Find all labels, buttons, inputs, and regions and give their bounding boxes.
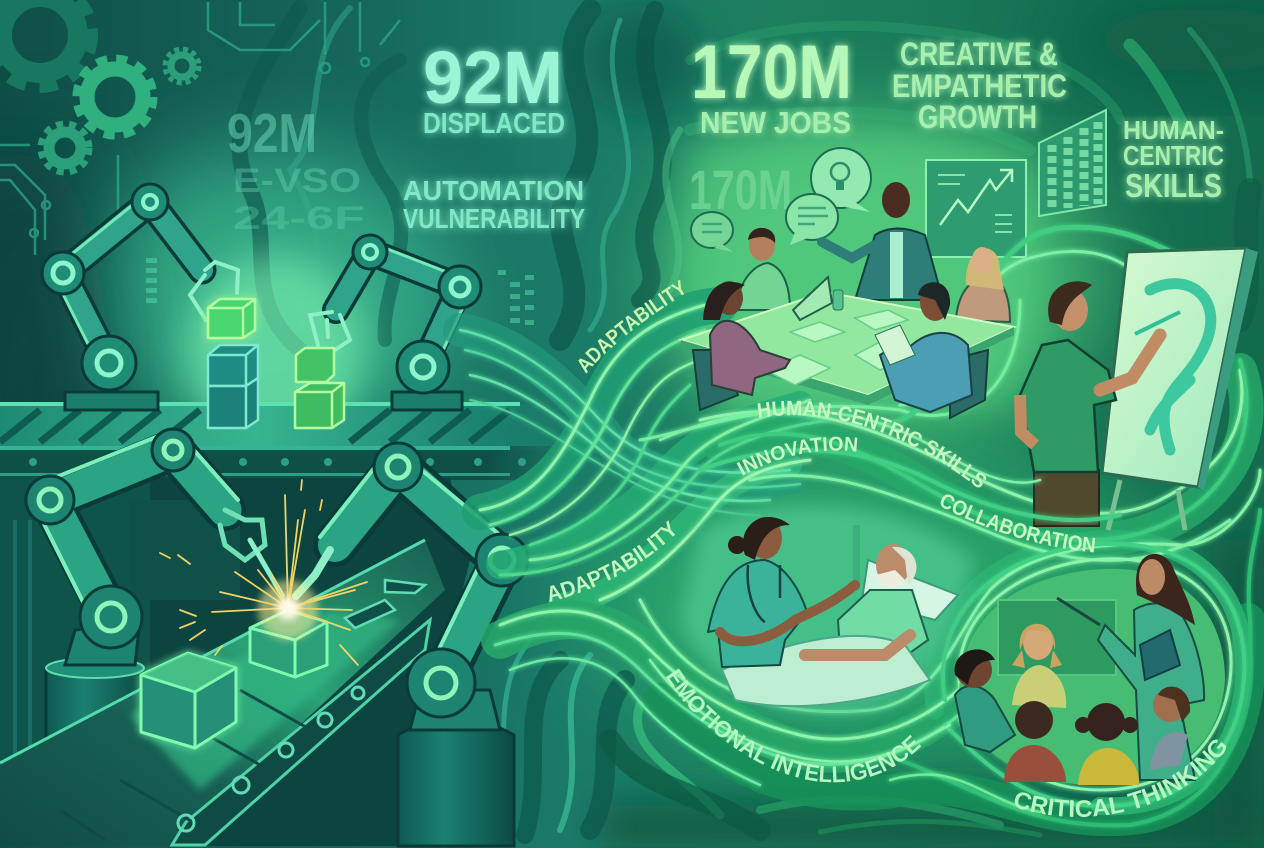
easel and canvas [1102, 248, 1258, 530]
robot base: lower left [46, 658, 144, 768]
pillow [862, 560, 958, 620]
data columns [146, 258, 534, 325]
robot arm: lower left [26, 429, 282, 665]
chart board [926, 160, 1026, 257]
ribbon label: adaptability upper: ADAPTABILITY [578, 280, 684, 374]
heading: automation vulnerability: VULNERABILITY [403, 203, 585, 234]
faded stat: 92M with garbled data [227, 102, 365, 236]
heading: 170M new jobs [691, 30, 852, 140]
person: seated child [1004, 701, 1066, 782]
person: patient [838, 544, 928, 660]
faded stat: 170M: 170M [689, 158, 792, 221]
lower conveyor belt [0, 540, 445, 846]
bed blanket [722, 636, 930, 706]
ribbon label: human-centric skills: HUMAN-CENTRIC SKILLS [758, 400, 986, 488]
robot arm: lower right [296, 443, 528, 846]
faded stat: 92M with garbled data: E-VSO [233, 162, 361, 200]
ribbon label: adaptability lower: ADAPTABILITY [549, 520, 676, 602]
heading: 170M new jobs: NEW JOBS [700, 105, 851, 140]
scene glow: meeting room [680, 131, 1030, 420]
person: girl [1012, 624, 1066, 708]
person: woman left [693, 281, 790, 410]
heading: automation vulnerability [403, 175, 585, 234]
ribbon label: innovation: INNOVATION [736, 436, 858, 476]
icon: lightbulb bubble [811, 148, 871, 212]
scene: patient care [680, 505, 975, 712]
upper conveyor belt [0, 402, 570, 480]
heading: human-centric skills [1123, 115, 1224, 204]
person: teacher [1057, 554, 1204, 780]
scene: meeting [681, 182, 1014, 418]
ribbon label: critical thinking: CRITICAL THINKING [1014, 740, 1226, 818]
ribbon bands [460, 305, 1249, 819]
person: nurse [708, 517, 855, 667]
welding sparks [160, 480, 367, 665]
robot arm: upper left [42, 184, 238, 410]
person: presenter [822, 182, 940, 300]
icon: speech bubble left [691, 212, 733, 252]
heading: 92M displaced: 92M [423, 36, 563, 119]
heading: 92M displaced: DISPLACED [423, 108, 565, 140]
patient arm [805, 635, 910, 655]
heading: human-centric skills: SKILLS [1125, 167, 1222, 204]
ribbon label: emotional intelligence: EMOTIONAL INTELLIGENCE [666, 668, 922, 782]
heading: creative and empathetic growth: EMPATHETIC [892, 68, 1067, 104]
ribbon label: collaboration: COLLABORATION [940, 494, 1096, 552]
person: painter [1020, 281, 1180, 526]
icon: speech bubble middle [786, 194, 838, 245]
circuit traces [0, 2, 400, 255]
heading: automation vulnerability: AUTOMATION [403, 175, 584, 206]
heading: human-centric skills: CENTRIC [1123, 140, 1224, 171]
person: pigtail girl [1075, 703, 1139, 785]
person: boy right [1150, 687, 1190, 770]
ribbon lines behind scenes [460, 227, 1260, 825]
person: man front [875, 282, 988, 418]
robot arm: upper right [310, 235, 481, 410]
central factory glow [185, 255, 365, 445]
heading: human-centric skills: HUMAN- [1123, 115, 1224, 145]
glowing cubes on belt [141, 610, 327, 748]
heading: 170M new jobs: 170M [691, 30, 852, 115]
heading: creative and empathetic growth: CREATIVE & [900, 36, 1058, 72]
scene: classroom [955, 554, 1225, 785]
ribbons in front [650, 411, 1120, 812]
faded stat: 92M with garbled data: 24-6F [233, 200, 365, 236]
icon: gears [0, 0, 199, 172]
heading: creative and empathetic growth [892, 36, 1067, 135]
speech bubbles [691, 148, 871, 252]
faded stat: 92M with garbled data: 92M [227, 102, 317, 164]
person: man at table [737, 228, 790, 310]
dashboard window [1039, 110, 1106, 216]
lower factory backdrop [0, 478, 470, 846]
heading: creative and empathetic growth: GROWTH [918, 99, 1037, 135]
person: woman right [956, 247, 1010, 322]
swirling wave texture [240, 8, 1250, 835]
stacked cubes [208, 299, 344, 428]
person: boy left [955, 649, 1015, 752]
table [681, 277, 1014, 405]
